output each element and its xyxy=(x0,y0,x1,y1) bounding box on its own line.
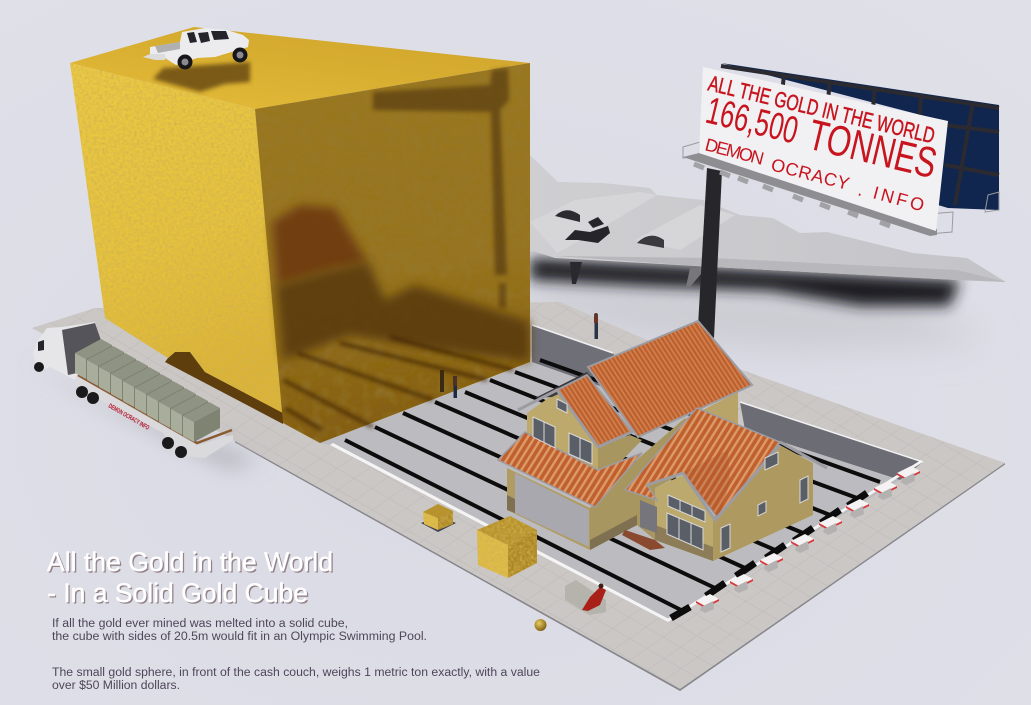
billboard tonnage: TONNES xyxy=(804,111,941,188)
billboard website: DEMON xyxy=(703,135,766,169)
title text: All the Gold in the World xyxy=(47,547,333,577)
title text xyxy=(47,547,333,608)
billboard post xyxy=(698,168,722,338)
pallet base xyxy=(78,375,232,443)
small gold pallet xyxy=(421,504,456,532)
right wing side wall xyxy=(713,445,813,561)
gable fascia xyxy=(518,390,632,447)
pool lane lines xyxy=(345,360,880,618)
body text: the cube with sides of 20.5m would fit in an Olympic Swimming Pool. xyxy=(52,631,427,643)
billboard headline: ALL THE GOLD IN THE WORLD xyxy=(706,71,937,148)
back wall xyxy=(660,392,738,465)
pallets of cash xyxy=(75,339,220,442)
cube floor fringe xyxy=(165,352,283,424)
title shadow xyxy=(48,548,334,610)
upper gable wall xyxy=(527,392,598,480)
garage door xyxy=(515,473,589,547)
person on walkway xyxy=(594,313,598,339)
right wing fascia xyxy=(647,442,827,520)
billboard tonnage: 166,500 xyxy=(702,90,802,152)
centre wall and door xyxy=(590,418,690,550)
title shadow: - In a Solid Gold Cube xyxy=(48,580,310,610)
semi truck xyxy=(33,322,233,458)
billboard website xyxy=(703,135,926,215)
billboard xyxy=(683,63,999,338)
cube reflections xyxy=(272,68,530,430)
cube top face xyxy=(70,27,530,109)
gold cube xyxy=(70,27,530,443)
trailer logo: DEMON OCRACY INFO xyxy=(107,403,150,432)
semi trailer xyxy=(75,378,233,458)
windows xyxy=(533,399,808,552)
cube left face xyxy=(70,63,283,413)
body text: over $50 Million dollars. xyxy=(52,680,180,692)
cube right face xyxy=(255,63,530,443)
pool floor xyxy=(320,362,900,622)
title shadow: All the Gold in the World xyxy=(48,548,334,578)
right wing front wall xyxy=(655,475,713,561)
pool walls xyxy=(532,325,923,480)
billboard face xyxy=(699,67,948,231)
title text: - In a Solid Gold Cube xyxy=(47,578,308,608)
medium gold cube xyxy=(477,516,537,578)
semi wheels xyxy=(34,362,187,458)
body text: If all the gold ever mined was melted into a solid cube, xyxy=(52,618,348,630)
garage roof xyxy=(498,432,642,507)
billboard website: OCRACY xyxy=(769,155,851,194)
cash couch with woman xyxy=(565,580,606,615)
plane shadow xyxy=(530,258,960,306)
title xyxy=(47,547,334,610)
main roof xyxy=(588,321,752,437)
pickup truck on cube xyxy=(143,28,250,92)
body text: The small gold sphere, in front of the cash couch, weighs 1 metric ton exactly, with a value xyxy=(52,667,540,679)
ground fade below plane xyxy=(530,280,990,350)
plaza floor xyxy=(32,302,1005,689)
right wing roof xyxy=(625,408,780,518)
billboard catwalk xyxy=(683,142,999,234)
billboard tonnage xyxy=(702,90,941,188)
gable roof xyxy=(557,375,632,447)
gold sphere xyxy=(534,619,546,631)
billboard website: INFO xyxy=(871,183,926,215)
billboard website: . xyxy=(856,180,866,200)
body text xyxy=(52,618,540,692)
semi cab xyxy=(33,322,102,380)
poolside loungers xyxy=(696,466,920,613)
house xyxy=(498,321,827,561)
truck ground shadow xyxy=(30,360,260,470)
garage wall xyxy=(507,468,590,550)
stealth bomber xyxy=(530,155,1006,287)
billboard back panel xyxy=(721,63,999,210)
people beside cube xyxy=(440,370,457,398)
